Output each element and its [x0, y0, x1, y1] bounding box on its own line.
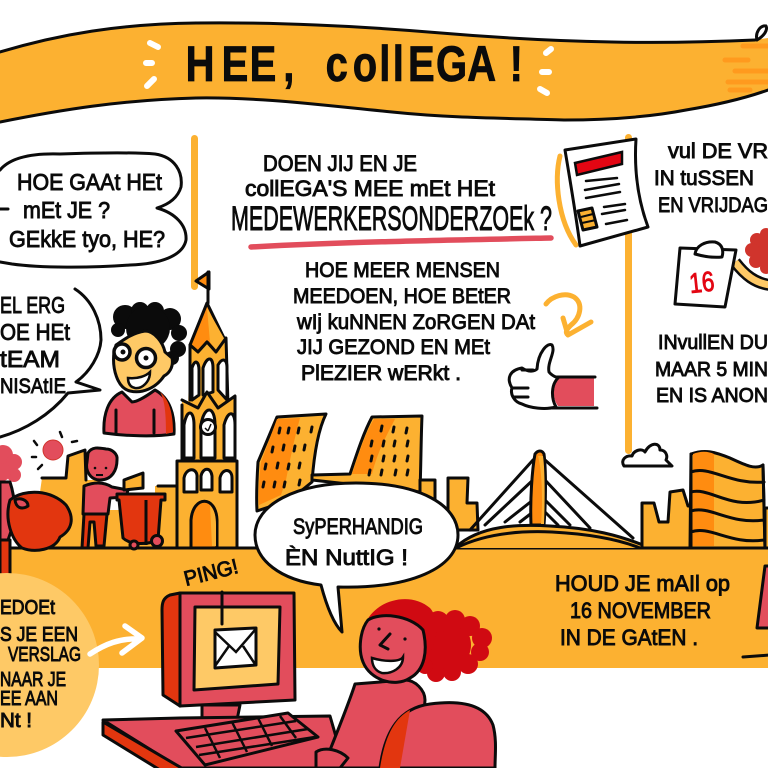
icon: banner curl — [757, 26, 767, 40]
sparks — [32, 432, 77, 469]
red header — [575, 152, 622, 175]
cloud — [623, 444, 672, 466]
stand — [202, 705, 240, 720]
nose — [380, 634, 390, 649]
bin — [117, 494, 165, 544]
cables — [470, 460, 633, 538]
smile — [372, 657, 403, 673]
monitor front — [180, 593, 295, 706]
flag — [196, 272, 209, 289]
building left — [257, 414, 326, 511]
man with glasses — [104, 302, 187, 436]
icon: questionnaire document — [557, 139, 648, 246]
pale circle callout: NAAR JE — [0, 669, 66, 691]
yellow band — [0, 548, 768, 668]
face — [114, 331, 172, 392]
speech bubble: hoe gaat het: mEt JE ? — [23, 197, 110, 223]
right secondary text: INvullEN DU — [658, 332, 768, 354]
speech bubble: superhandig — [255, 483, 458, 632]
speech bubble: hoe gaat het: GEkkE tyo, HE? — [9, 226, 165, 252]
ponytail — [417, 610, 492, 682]
speech bubble: superhandig: SyPERHANDIG — [293, 514, 423, 539]
right intro text: vul DE VR — [668, 140, 768, 163]
banner shading dashes — [725, 46, 768, 90]
main question — [231, 151, 552, 247]
main question: DOEN JIJ EN JE — [263, 151, 417, 176]
legs — [82, 514, 107, 548]
person holding calendar — [675, 228, 768, 307]
hair — [745, 228, 768, 274]
mail reminder text: 16 NOVEMBER — [570, 598, 711, 623]
heading: HEE, collEGA! — [186, 36, 523, 92]
calendar sheet — [675, 248, 736, 307]
hair — [111, 302, 187, 365]
torso — [83, 483, 128, 514]
pylon — [531, 451, 546, 525]
icon: clock — [200, 420, 216, 434]
skyline block — [642, 490, 692, 548]
desk — [103, 716, 345, 768]
body copy: JIJ GEZOND EN MEt — [297, 336, 490, 359]
hand — [509, 344, 558, 408]
hair — [0, 445, 22, 482]
sleeve — [554, 377, 594, 406]
title banner — [0, 23, 768, 122]
arrow: to computer — [90, 626, 142, 654]
title sparkles right — [540, 49, 551, 93]
ping line — [220, 592, 224, 624]
bin lid tab — [124, 473, 143, 490]
computer — [103, 592, 345, 768]
main question: MEDEWERKERSONDERZOEk ? — [231, 200, 552, 238]
pale circle callout — [0, 573, 99, 757]
chair — [380, 703, 496, 768]
buildings right — [642, 451, 768, 548]
mail reminder text — [555, 571, 730, 650]
speech bubble: superhandig: ÈN NuttIG ! — [285, 545, 408, 570]
upper lantern — [188, 340, 228, 408]
speech bubble: hoe gaat het: HOE GAAt HEt — [17, 169, 163, 195]
ground line — [0, 546, 768, 550]
monitor at right edge — [743, 566, 768, 657]
keyboard — [176, 713, 318, 765]
arm — [735, 262, 768, 285]
hand — [695, 242, 723, 257]
right secondary text: EN IS ANON — [656, 385, 768, 407]
text lines — [585, 178, 627, 224]
speech bubble: team: tEAM — [0, 346, 60, 372]
monitor screen — [194, 607, 280, 690]
ping label: PING! — [182, 555, 241, 591]
torso — [330, 680, 425, 768]
sun ball — [43, 440, 63, 460]
pale circle callout: VERSLAG — [8, 644, 81, 666]
door — [191, 501, 217, 548]
monitor side — [162, 593, 180, 706]
trousers — [0, 540, 10, 583]
yellow divider right — [625, 134, 632, 454]
red underline — [251, 238, 551, 247]
right intro text — [654, 140, 768, 217]
speech bubble: team: OE HEt — [0, 319, 71, 345]
speech bubble: team: EL ERG — [0, 292, 65, 318]
man at waste bin — [82, 448, 165, 549]
calendar number: 16 — [688, 266, 716, 299]
woman at computer — [316, 599, 496, 768]
pale circle callout: Nt ! — [0, 710, 32, 732]
cathedral tower — [177, 272, 237, 548]
sack — [8, 492, 71, 550]
yellow shadow — [557, 156, 576, 245]
hand — [316, 749, 348, 768]
modern buildings — [257, 414, 435, 511]
body — [104, 390, 174, 436]
mail reminder text: HOUD JE mAIl op — [555, 571, 730, 596]
right secondary text — [655, 332, 768, 407]
arrow: curved yellow — [546, 295, 591, 335]
title sparkles left — [146, 43, 158, 86]
speech bubble: hoe gaat het — [0, 153, 186, 267]
pale circle callout: EE AAN — [0, 688, 58, 710]
deck arch — [456, 525, 650, 548]
wavy tower — [690, 451, 765, 548]
yellow checklist — [578, 208, 597, 230]
hand — [15, 499, 28, 508]
block far right — [765, 508, 768, 548]
body copy: wIj kuNNEN ZoRGEN DAt — [296, 311, 535, 334]
building right — [312, 416, 422, 492]
hair and head — [87, 448, 117, 480]
pale circle callout: EDOEt — [0, 597, 55, 619]
icon: thumbs up — [509, 344, 597, 408]
icon: envelope — [215, 628, 256, 668]
speech bubble: team — [0, 289, 101, 437]
skyline left — [32, 450, 176, 548]
speech bubble: team: NISAtIE — [0, 375, 66, 398]
mail reminder text: IN DE GAtEN . — [560, 625, 698, 650]
body copy: HOE MEER MENSEN — [305, 259, 500, 282]
right intro text: IN tuSSEN — [654, 167, 754, 190]
skyline and yellow band — [0, 450, 768, 668]
middle lantern — [182, 392, 236, 460]
smile — [128, 372, 150, 388]
body copy — [293, 259, 535, 385]
yellow divider left — [191, 135, 198, 290]
body — [0, 482, 14, 545]
spire — [190, 303, 225, 352]
woman with bag (left) — [0, 432, 77, 583]
paper — [565, 139, 648, 246]
hair top — [366, 599, 436, 660]
building behind bridge — [448, 478, 478, 530]
building windows — [263, 426, 408, 487]
body copy: PlEZIER wERkt . — [301, 362, 461, 385]
tower base — [177, 461, 237, 548]
pale circle callout: S JE EEN — [0, 624, 78, 646]
body copy: MEEDOEN, HOE BEtER — [293, 285, 511, 308]
face — [360, 616, 425, 682]
glasses — [114, 344, 130, 360]
bridge — [448, 451, 650, 548]
main question: collEGA'S MEE mEt HEt — [245, 176, 495, 201]
